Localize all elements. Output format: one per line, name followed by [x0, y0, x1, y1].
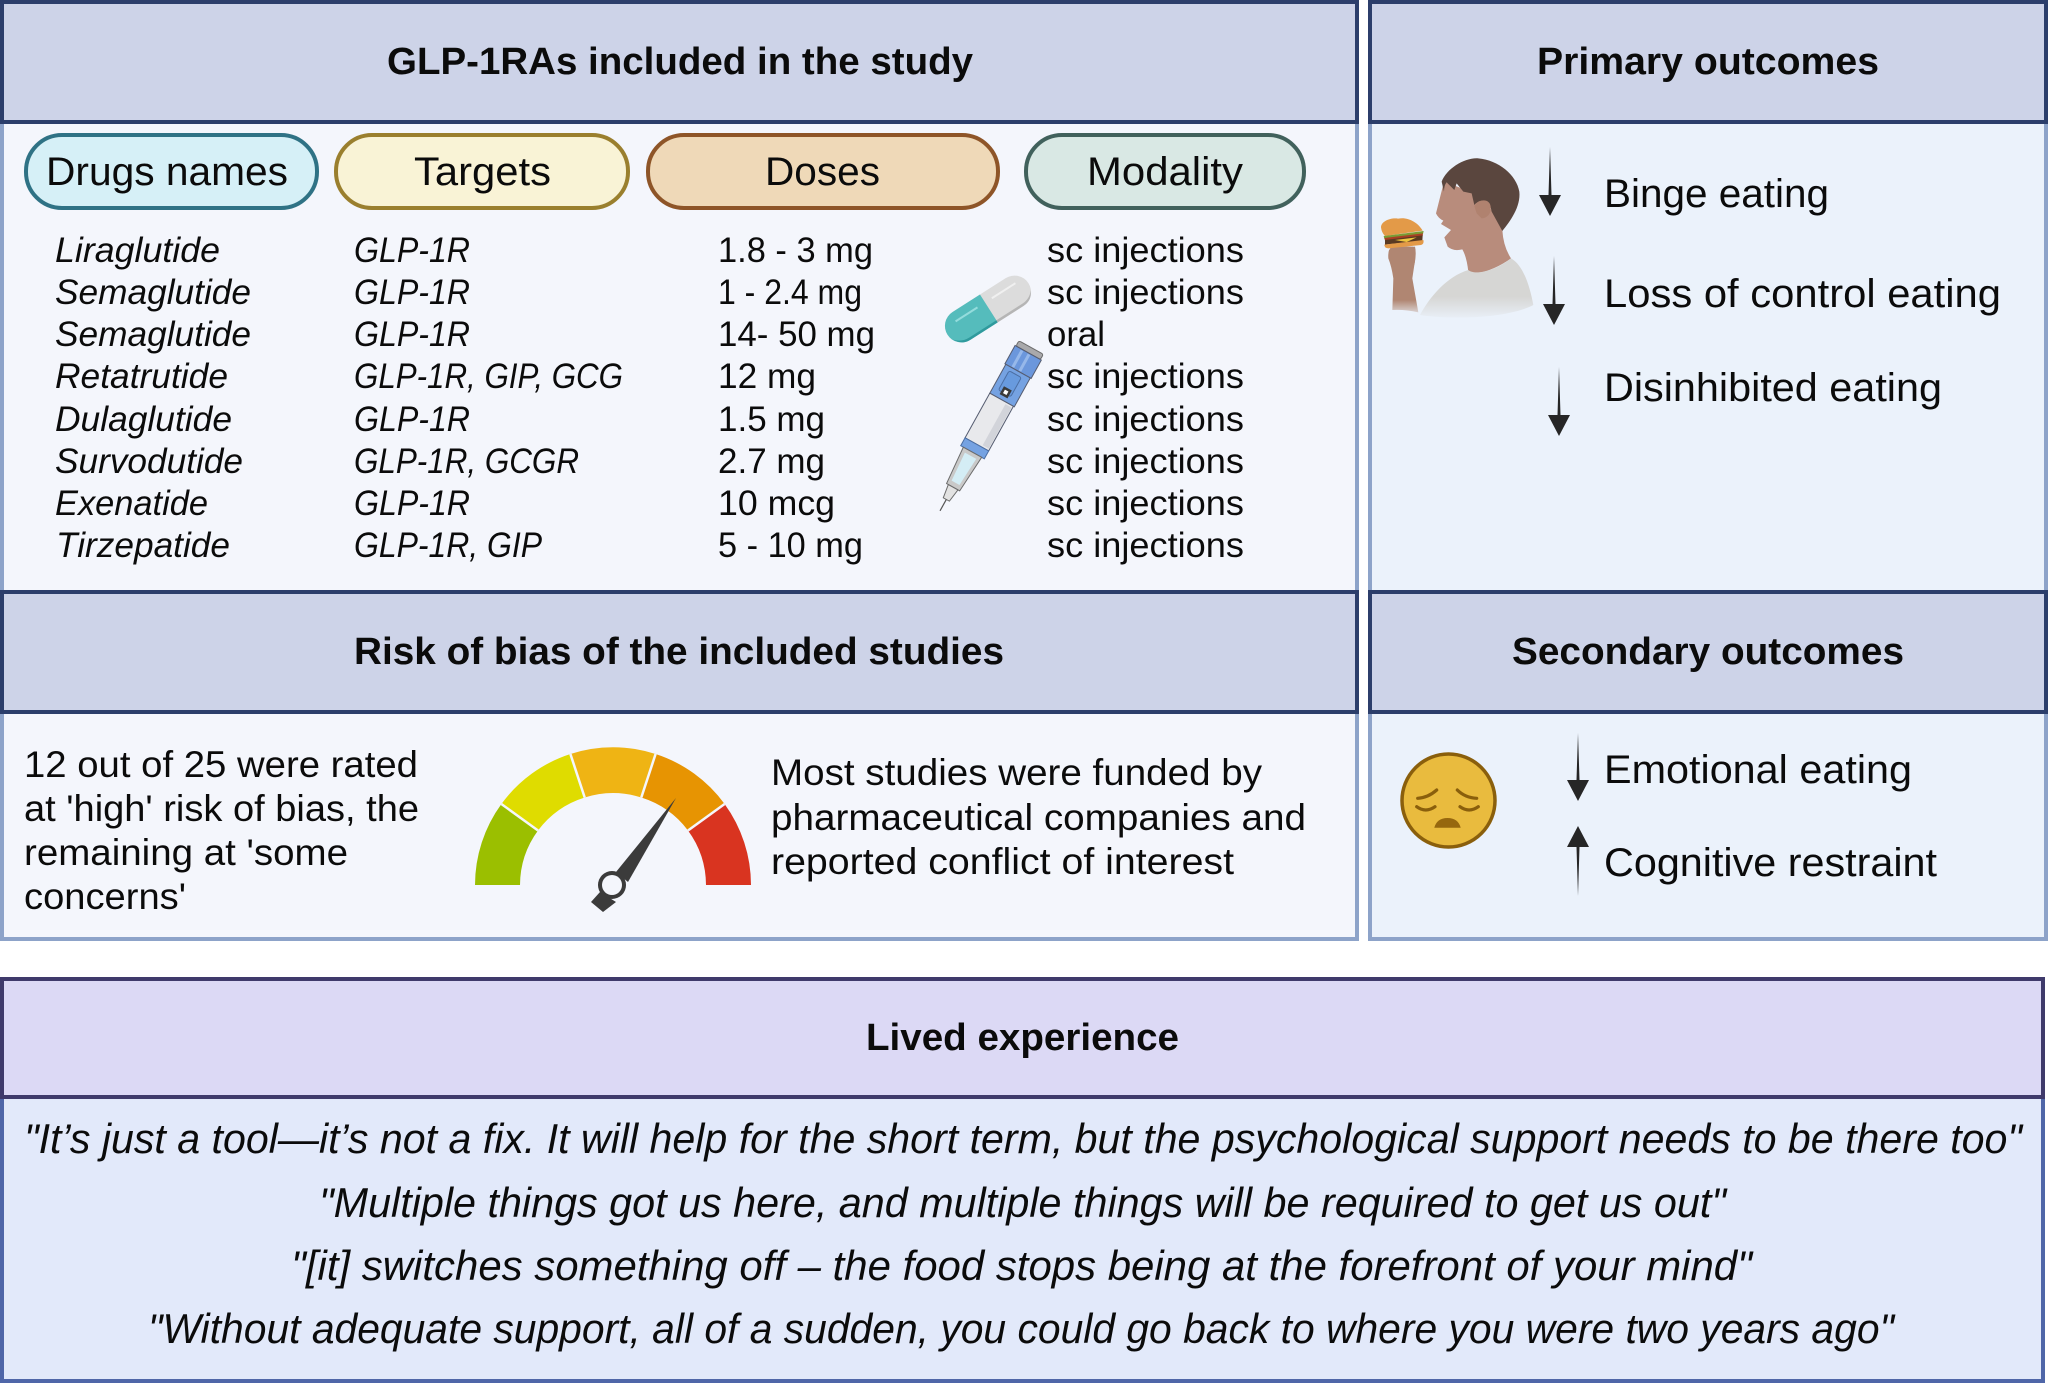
icon: injection pen: [927, 340, 1044, 518]
panel: GLP-1RAs included in the study: [2, 2, 1357, 594]
text: funding note: [771, 752, 1306, 882]
text: risk summary: [24, 744, 419, 917]
panel: Lived experience: [2, 979, 2043, 1381]
pill: Targets: [336, 135, 628, 208]
column: modality: sc injections: [1047, 357, 1244, 396]
column: doses: 1.5 mg: [718, 400, 825, 439]
quotes: "Without adequate support, all of a sudden, you could go back to where you were two years ago": [148, 1305, 1896, 1352]
panel: Risk of bias of the included studies: [2, 592, 1357, 939]
label: Loss of control eating: Loss of control eating: [1604, 272, 2001, 316]
column: targets: GLP-1R: [354, 400, 470, 439]
heading: Primary outcomes: Primary outcomes: [1537, 41, 1879, 83]
column: targets: GLP-1R, GIP, GCG: [354, 357, 623, 396]
column: drug names: Retatrutide: [55, 357, 228, 396]
column: drug names: Tirzepatide: [56, 526, 230, 565]
icon: person eating burger: [1381, 158, 1533, 318]
quotes: "[it] switches something off – the food stops being at the forefront of your mind": [291, 1242, 1754, 1289]
column: targets: GLP-1R, GIP: [354, 526, 543, 565]
quotes: "It’s just a tool—it’s not a fix. It will help for the short term, but the psychological support needs to be there too": [24, 1115, 2024, 1162]
column: modality: oral: [1047, 315, 1105, 354]
arrow: emotional eating down: [1567, 733, 1589, 801]
heading: Secondary outcomes: Secondary outcomes: [1512, 631, 1904, 673]
column: modality: sc injections: [1047, 484, 1244, 523]
arrow: binge eating down: [1539, 147, 1561, 216]
column: doses: 14- 50 mg: [718, 315, 875, 354]
icon: sad face: [1402, 754, 1495, 847]
column: targets: [354, 231, 623, 565]
column: drug names: Exenatide: [55, 484, 208, 523]
column: modality: sc injections: [1047, 526, 1244, 565]
label: Cognitive restraint: Cognitive restraint: [1604, 841, 1937, 885]
quotes: "Multiple things got us here, and multiple things will be required to get us out": [319, 1179, 1728, 1226]
text: risk summary: remaining at 'some: [24, 832, 348, 873]
panel: Primary outcomes: [1370, 2, 2046, 594]
column: drug names: Liraglutide: [55, 231, 220, 270]
pill: Drugs names: Drugs names: [46, 150, 288, 194]
column: targets: GLP-1R, GCGR: [354, 442, 579, 481]
column: targets: GLP-1R: [354, 315, 470, 354]
arrow: loss of control down: [1543, 256, 1565, 325]
pill: Modality: Modality: [1087, 150, 1243, 194]
arrow: cognitive restraint up: [1567, 826, 1589, 896]
text: risk summary: at 'high' risk of bias, the: [24, 788, 419, 829]
label: Binge eating: Binge eating: [1604, 172, 1829, 216]
column: targets: GLP-1R: [354, 231, 470, 270]
column: modality: sc injections: [1047, 400, 1244, 439]
heading: GLP-1RAs: GLP-1RAs included in the study: [387, 41, 973, 83]
column: doses: 1 - 2.4 mg: [718, 273, 862, 312]
column: targets: GLP-1R: [354, 273, 470, 312]
pill: Drugs names: [26, 135, 317, 208]
column: drug names: [55, 231, 251, 565]
column: doses: [718, 231, 875, 565]
heading: Lived experience: Lived experience: [866, 1017, 1179, 1059]
pill: Modality: [1026, 135, 1304, 208]
column: drug names: Survodutide: [55, 442, 243, 481]
arrow: disinhibited down: [1548, 367, 1570, 436]
column: modality: sc injections: [1047, 273, 1244, 312]
column: doses: 12 mg: [718, 357, 816, 396]
text: risk summary: 12 out of 25 were rated: [24, 744, 418, 785]
column: drug names: Dulaglutide: [55, 400, 232, 439]
text: funding note: pharmaceutical companies and: [771, 797, 1306, 838]
panel: Secondary outcomes: [1370, 592, 2046, 939]
chart: risk gauge: [475, 747, 751, 912]
column: drug names: Semaglutide: [55, 273, 251, 312]
pill: Doses: [648, 135, 998, 208]
column: doses: 1.8 - 3 mg: [718, 231, 873, 270]
column: doses: 5 - 10 mg: [718, 526, 863, 565]
quotes: [24, 1115, 2024, 1352]
text: funding note: Most studies were funded by: [771, 752, 1263, 793]
label: Disinhibited eating: Disinhibited eating: [1604, 366, 1942, 410]
column: targets: GLP-1R: [354, 484, 470, 523]
gauge needle: [591, 798, 676, 912]
column: modality: sc injections: [1047, 442, 1244, 481]
text: funding note: reported conflict of interest: [771, 841, 1235, 882]
column: modality: sc injections: [1047, 231, 1244, 270]
column: doses: 10 mcg: [718, 484, 835, 523]
column: doses: 2.7 mg: [718, 442, 825, 481]
label: Emotional eating: Emotional eating: [1604, 748, 1912, 792]
column: modality: [1047, 231, 1244, 565]
text: risk summary: concerns': [24, 876, 186, 917]
pill: Targets: Targets: [414, 150, 551, 194]
pill: Doses: Doses: [765, 150, 880, 194]
column: drug names: Semaglutide: [55, 315, 251, 354]
heading: Risk of bias: Risk of bias of the included studies: [354, 631, 1004, 673]
icon: capsule: [939, 269, 1037, 349]
